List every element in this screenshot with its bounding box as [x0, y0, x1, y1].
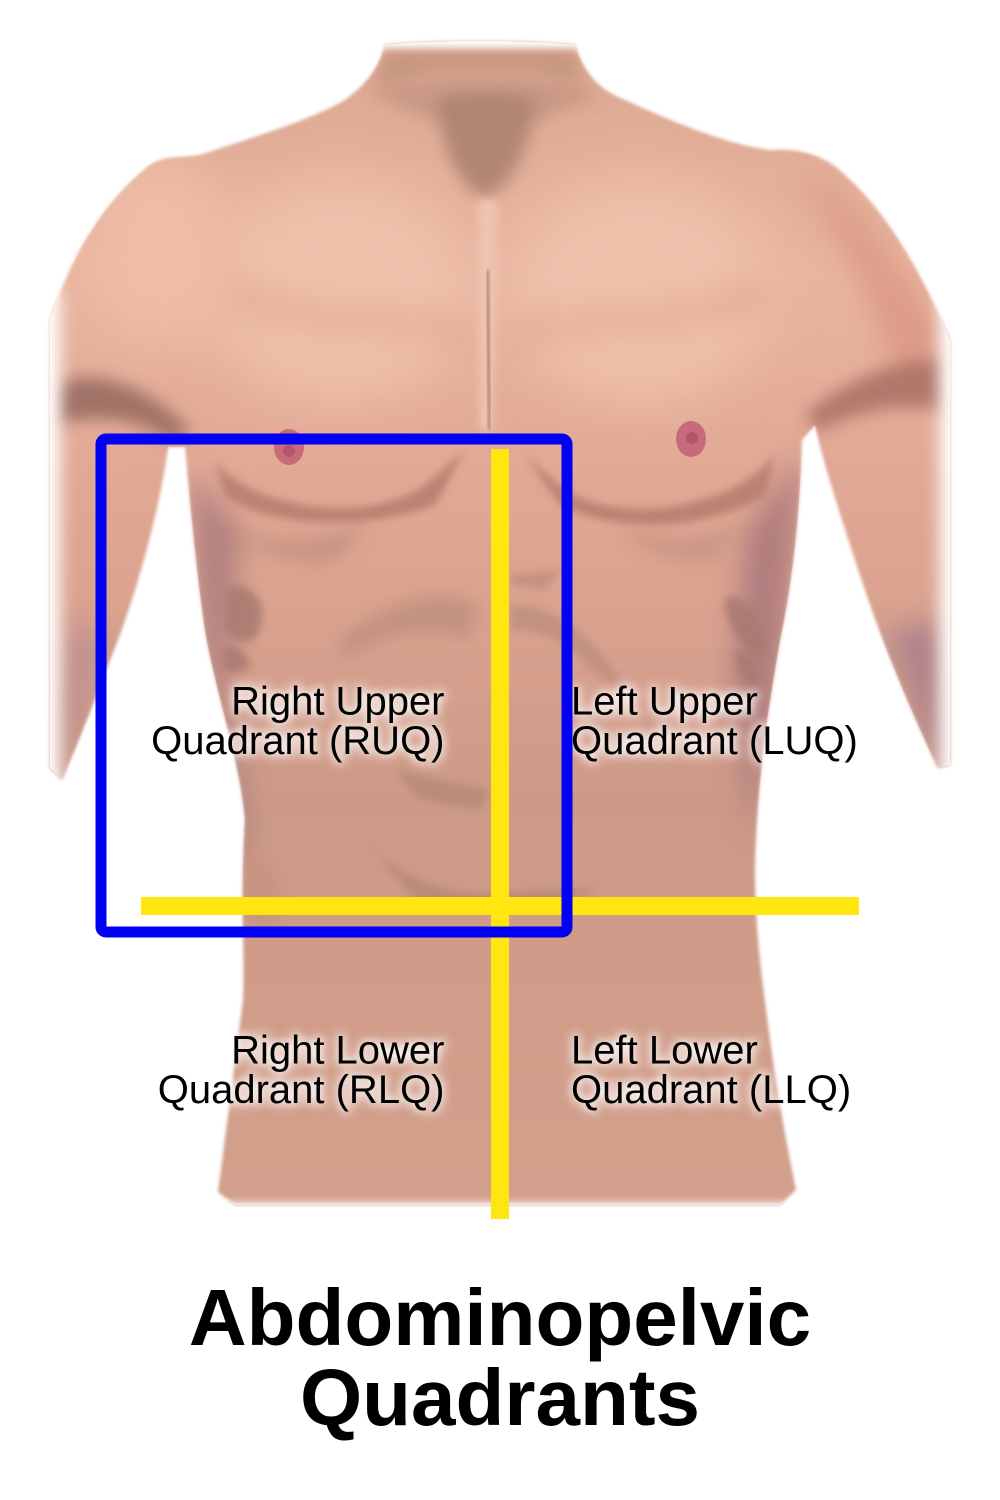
torso silhouette — [50, 41, 950, 1205]
label: right upper quadrant: Quadrant (RUQ) — [151, 719, 444, 763]
torso shading — [30, 20, 970, 1223]
label: left lower quadrant: Quadrant (LLQ) — [571, 1068, 851, 1112]
quadrant divider: vertical line — [491, 449, 509, 1219]
edge fades — [50, 287, 72, 780]
nipple: right — [274, 429, 304, 465]
label: right lower quadrant: Quadrant (RLQ) — [158, 1068, 444, 1112]
label: left upper quadrant: Quadrant (LUQ) — [571, 719, 858, 763]
label: left lower quadrant — [571, 1028, 851, 1112]
label: right upper quadrant: Quadrant (RUQ) — [151, 719, 444, 763]
label: right upper quadrant — [151, 680, 444, 763]
highlight box: right upper quadrant — [101, 439, 567, 932]
quadrant divider: horizontal line — [141, 897, 859, 915]
title: Abdominopelvic — [189, 1273, 811, 1362]
label: right lower quadrant: Right Lower — [231, 1028, 444, 1072]
label: right upper quadrant: Right Upper — [231, 680, 444, 724]
label: left lower quadrant: Left Lower — [571, 1028, 758, 1072]
illustration: male torso — [30, 20, 970, 1223]
label: right upper quadrant: Right Upper — [231, 680, 444, 724]
label: right lower quadrant — [158, 1028, 444, 1112]
label: right lower quadrant: Quadrant (RLQ) — [158, 1068, 444, 1112]
label: left upper quadrant: Quadrant (LUQ) — [571, 719, 858, 763]
label: left lower quadrant: Left Lower — [571, 1028, 758, 1072]
label: left upper quadrant: Left Upper — [571, 680, 758, 724]
title — [189, 1273, 811, 1442]
label: left upper quadrant — [571, 680, 858, 763]
label: left upper quadrant: Left Upper — [571, 680, 758, 724]
title: Quadrants — [300, 1353, 700, 1442]
label: left lower quadrant: Quadrant (LLQ) — [571, 1068, 851, 1112]
nipple: left — [676, 421, 706, 457]
label: right lower quadrant: Right Lower — [231, 1028, 444, 1072]
